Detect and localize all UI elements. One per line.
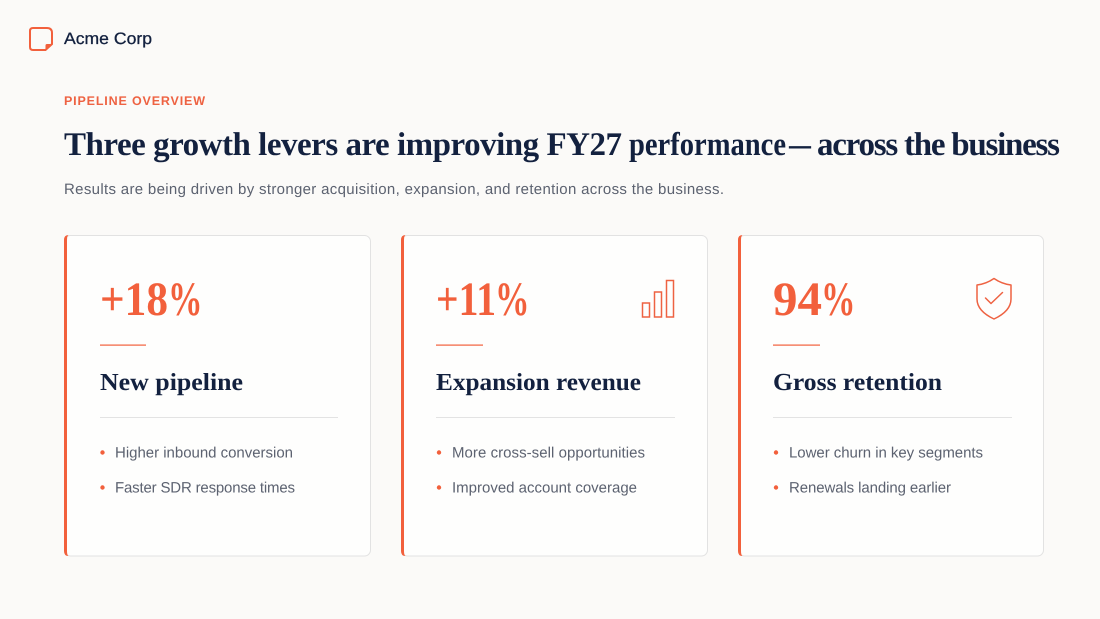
bullet list: More cross-sell opportunities (452, 444, 645, 462)
bullet list (100, 444, 295, 496)
panel: gross retention (738, 235, 1044, 556)
metric: 94 (773, 273, 822, 326)
icon: shield check (977, 278, 1011, 319)
metric: % (168, 273, 202, 326)
title: Three growth levers are improving FY27 (64, 127, 622, 163)
heading: Expansion revenue (436, 369, 641, 396)
title (64, 127, 1060, 163)
title: — (788, 127, 812, 163)
heading: New pipeline (100, 369, 243, 396)
bullet list (437, 444, 645, 496)
bullet list (774, 444, 983, 496)
bullet list: Faster SDR response times (115, 480, 295, 496)
subtitle: Results are being driven by stronger acquisition, expansion, and retention across the business. (64, 181, 724, 198)
bullet list: Lower churn in key segments (789, 444, 983, 462)
title: across the business (817, 127, 1060, 163)
metric: +18 (100, 273, 168, 326)
heading: Gross retention (773, 369, 942, 396)
panel: expansion revenue (401, 235, 708, 556)
metric: % (821, 273, 856, 326)
bullet list: Renewals landing earlier (789, 480, 951, 496)
panel: new pipeline (64, 235, 370, 556)
icon: bar chart (642, 280, 674, 317)
title: performance (629, 127, 786, 163)
metric: +11 (436, 273, 496, 326)
metric: % (495, 273, 530, 326)
eyebrow: PIPELINE OVERVIEW (64, 94, 205, 108)
bullet list: Improved account coverage (452, 480, 637, 496)
bullet list: Higher inbound conversion (115, 444, 293, 462)
metric (773, 273, 856, 326)
brand name: Acme Corp (64, 30, 152, 48)
logo icon (30, 28, 52, 50)
